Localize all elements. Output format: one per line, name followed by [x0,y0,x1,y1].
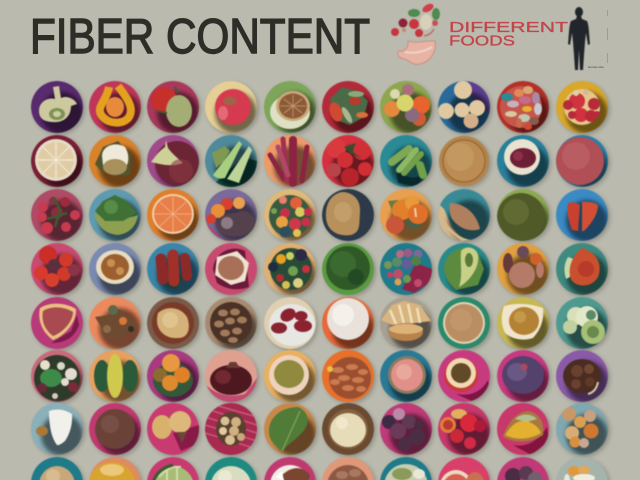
icon: yellow sphere [88,457,141,480]
icon: maroon fruit [147,135,199,188]
icon: nuts in bowl [89,243,141,296]
icon: grapefruit halves [438,457,490,480]
subtitle: different foods: DIFFERENT [449,20,568,36]
icon: purple plum [497,350,549,403]
icon: tan seed on teal [438,189,490,242]
icon: nuts on striped mat [205,403,257,455]
icon: human silhouette [568,7,590,70]
icon: cream food on teal [205,457,257,480]
icon: citrus slice [31,135,83,188]
icon: colored berries [380,243,432,295]
icon: oranges with leaf [380,189,432,242]
icon: greens in bowl [89,189,141,242]
icon: red fruit with green slice [556,243,608,296]
food grid [31,81,608,480]
icon: white root on blue [31,403,83,456]
size note: Human size [588,65,604,69]
icon: dark green salad [31,350,83,403]
icon: cream balls [438,81,491,134]
icon: two mushrooms [147,403,199,455]
icon: tan grains [31,457,83,480]
icon: pink grain bowl [380,350,432,403]
icon: brown disc on plate [264,81,316,134]
icon: red peppers [556,189,608,242]
icon: dates on white plate [264,297,316,349]
icon: tomato and pear [147,81,199,134]
icon: brown ball and fruits [497,243,549,296]
icon: grain in teal bowl [438,297,490,349]
icon: white hexagon with brown [205,243,257,295]
icon: half fruit on magenta [438,350,490,402]
icon: white and brown slices [264,457,316,480]
icon: orange and white pieces [556,457,608,480]
icon: green leaf [264,403,316,456]
icon: dark plum [205,350,257,402]
icon: apricots [556,403,608,456]
icon: food and stomach [391,2,440,64]
icon: fruit and purple mass [205,189,257,242]
subtitle: different foods [449,20,568,50]
icon: red apple [205,81,257,134]
icon: cucumber slices [205,135,257,188]
icon: rice on brown [147,297,199,349]
icon: tan grain mass [322,189,374,241]
icon: half fruit olive centre [264,350,316,403]
subtitle: different foods: FOODS [449,34,515,50]
icon: red fruits and citrus [438,403,490,456]
icon: mixed fruit [380,81,432,134]
icon: plate with red berries [497,135,549,188]
icon: melon with yellow centre [89,350,141,403]
icon: green lettuce [147,457,199,480]
icon: yellow pastry [497,403,549,455]
icon: green and white slices [380,457,432,480]
icon: fennel [31,81,83,134]
icon: oranges on leaves [147,350,199,403]
icon: red tomatoes [31,243,83,296]
icon: brown nuts [556,350,608,403]
icon: onion and greens [89,135,141,188]
icon: strawberries [556,81,608,134]
icon: yellow pepper [89,81,141,134]
icon: celery [380,135,432,188]
icon: red meat ball [556,135,608,188]
icon: dark plums [497,457,549,480]
icon: red stalks [264,135,316,188]
icon: tomatoes [322,135,374,188]
icon: crusted grain disc [439,136,489,186]
icon: fig half [31,297,83,349]
icon: brown pieces on salmon [322,457,374,480]
icon: shell with grains [497,297,549,350]
title: FIBER CONTENT [30,10,370,64]
icon: brown ball [89,403,141,456]
icon: pale green slices [556,297,608,350]
icon: orange slice [147,189,199,242]
icon: raspberries [31,189,83,242]
icon: red sausages [147,243,199,296]
icon: green dill [322,243,374,295]
icon: pastry slices [380,297,432,350]
icon: dark berries [380,403,432,456]
height scale [607,10,608,63]
icon: dried brown mix [89,297,141,350]
icon: avocado and leaf [438,243,490,296]
icon: cream beans in bowl [322,403,374,455]
icon: jelly beans [497,81,549,134]
icon: colorful fruit salad [264,189,316,242]
icon: mossy green ball [497,189,549,242]
icon: green salad with peppers [322,81,374,134]
icon: white rice ball [322,297,374,350]
icon: almonds on orange [322,350,374,402]
icon: dark fruit mix [264,243,316,296]
icon: almonds [205,297,257,350]
